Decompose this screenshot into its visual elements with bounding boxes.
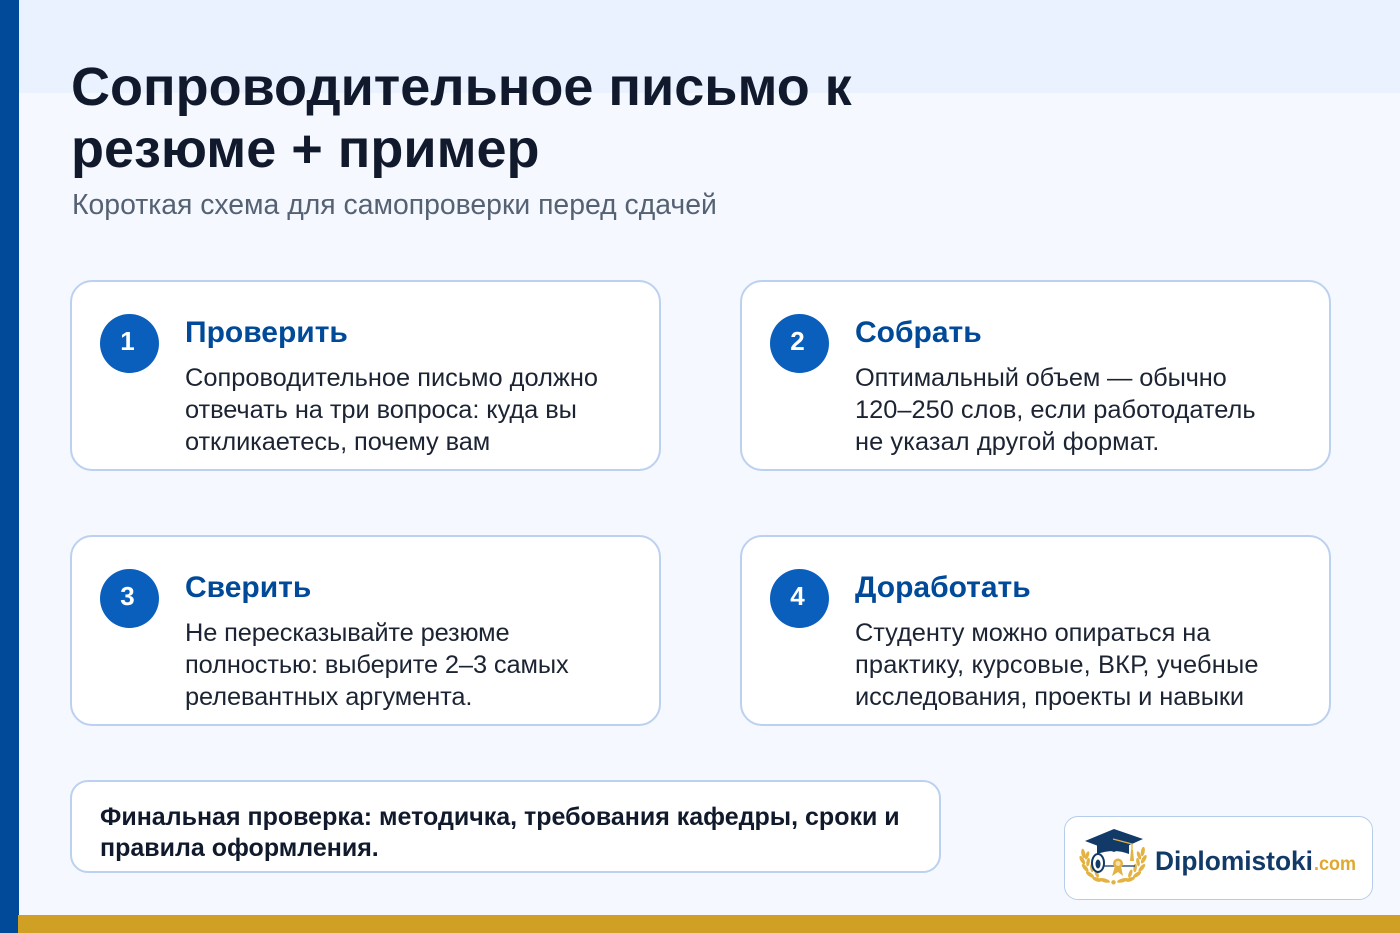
step 3 number: 3 [120,581,135,611]
step 2 number: 2 [790,326,805,356]
step 4 heading: Доработать [855,571,1031,604]
step 3 text: релевантных аргумента. [185,683,472,711]
step 3 text: полностью: выберите 2–3 самых [185,651,569,679]
title: резюме + пример [71,119,540,179]
panel: step 2 [740,280,1331,471]
top band [19,0,1400,93]
step 1 number [100,314,159,373]
step 1 number: 1 [120,326,135,356]
step 2 number [770,314,829,373]
panel: step 1 [70,280,661,471]
icon: diploma scroll [1092,854,1135,876]
icon: laurel wreath [1078,846,1148,884]
bottom accent bar [18,915,1400,933]
step 1 text [185,364,598,456]
step 3 text [185,619,569,711]
step 2 text: 120–250 слов, если работодатель [855,396,1256,424]
step 3 text: Не пересказывайте резюме [185,619,510,647]
step 1 heading: Проверить [185,316,348,349]
step 2 text: не указал другой формат. [855,428,1159,456]
panel: final check [70,780,941,873]
step 2 text: Оптимальный объем — обычно [855,364,1227,392]
final check text: правила оформления. [100,834,379,862]
step 3 number [100,569,159,628]
logo wordmark: Diplomistoki [1155,846,1313,876]
step 1 text: отвечать на три вопроса: куда вы [185,396,577,424]
step 4 text: Студенту можно опираться на [855,619,1210,647]
step 4 number [770,569,829,628]
step 1 text: Сопроводительное письмо должно [185,364,598,392]
logo card [1064,816,1373,900]
final check text [100,803,900,862]
title: Сопроводительное письмо к [71,57,852,117]
subtitle: Короткая схема для самопроверки перед сдачей [72,189,717,221]
logo [1079,829,1356,884]
step 2 heading: Собрать [855,316,982,349]
icon: graduation cap [1085,829,1143,861]
step 1 text: откликаетесь, почему вам [185,428,490,456]
step 4 text: исследования, проекты и навыки [855,683,1244,711]
step 4 number: 4 [790,581,805,611]
title [71,57,852,179]
step 4 text [855,619,1259,711]
logo domain: .com [1314,854,1356,875]
step 4 text: практику, курсовые, ВКР, учебные [855,651,1259,679]
step 3 heading: Сверить [185,571,311,604]
left accent bar [0,0,19,933]
step 2 text [855,364,1256,456]
panel: step 4 [740,535,1331,726]
final check text: Финальная проверка: методичка, требования кафедры, сроки и [100,803,900,831]
panel: step 3 [70,535,661,726]
